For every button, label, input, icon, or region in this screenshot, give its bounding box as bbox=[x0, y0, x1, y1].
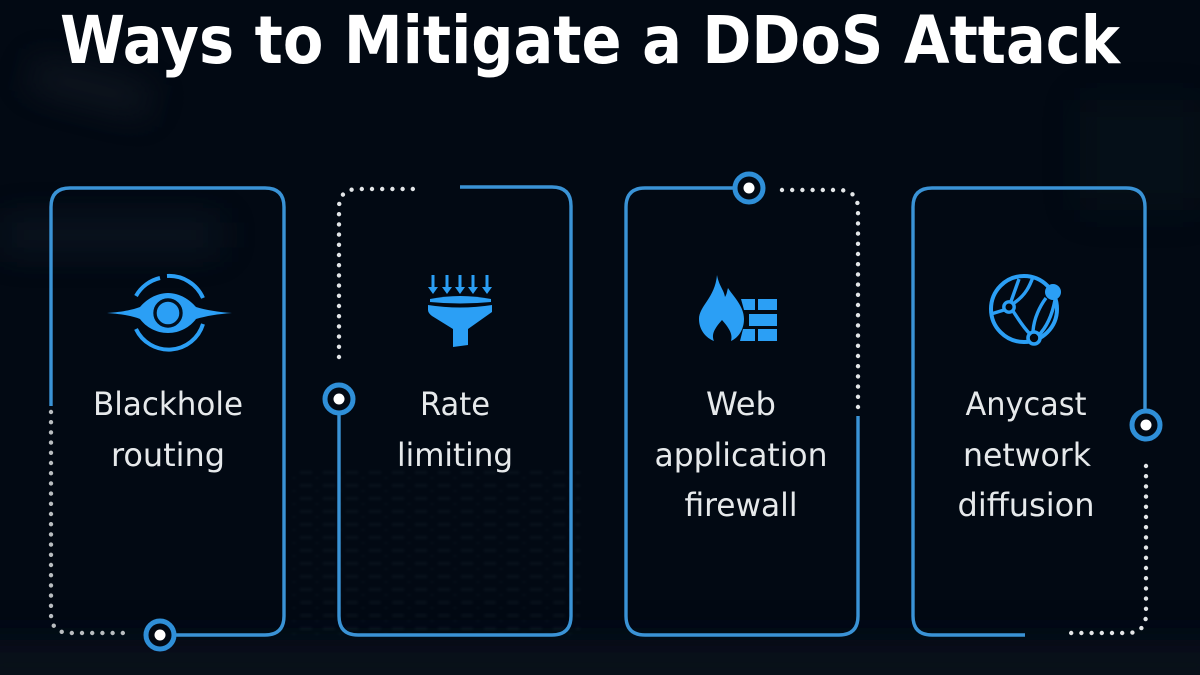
icon: funnel bbox=[428, 275, 492, 347]
label: rate limiting bbox=[397, 385, 513, 474]
icon: network globe bbox=[991, 276, 1061, 344]
label: rate limiting: Rate bbox=[420, 385, 490, 423]
icon: firewall flame bbox=[699, 275, 777, 341]
label: rate limiting: limiting bbox=[397, 436, 513, 474]
panel: rate limiting bbox=[325, 187, 571, 635]
panel: anycast network diffusion bbox=[913, 188, 1160, 635]
label: web application firewall: application bbox=[654, 436, 828, 474]
label: anycast network diffusion: diffusion bbox=[958, 486, 1094, 524]
panel: blackhole routing bbox=[51, 188, 284, 649]
label: web application firewall: Web bbox=[706, 385, 776, 423]
label: blackhole routing: Blackhole bbox=[93, 385, 243, 423]
panel: web application firewall bbox=[626, 174, 858, 635]
icon: black hole bbox=[107, 276, 232, 350]
label: blackhole routing bbox=[93, 385, 243, 474]
label: anycast network diffusion: Anycast bbox=[966, 385, 1086, 423]
label: web application firewall bbox=[654, 385, 828, 524]
label: web application firewall: firewall bbox=[684, 486, 798, 524]
label: blackhole routing: routing bbox=[111, 436, 225, 474]
title: Ways to Mitigate a DDoS Attack bbox=[60, 2, 1122, 79]
label: anycast network diffusion: network bbox=[963, 436, 1091, 474]
label: anycast network diffusion bbox=[958, 385, 1094, 524]
